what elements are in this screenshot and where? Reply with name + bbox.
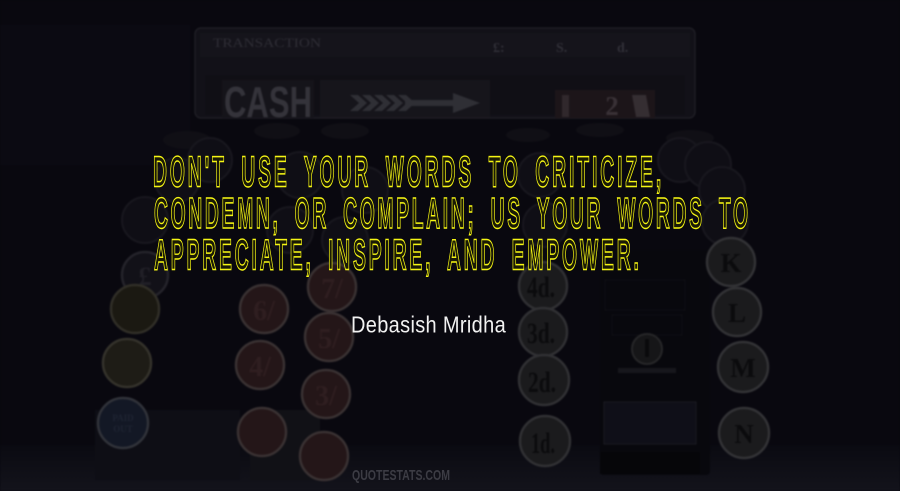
price counter digits — [555, 90, 655, 121]
key labels: letters: K — [720, 248, 742, 278]
knob — [632, 334, 662, 364]
author: Debasish Mridha — [351, 311, 507, 338]
label: pounds shillings pence — [493, 41, 628, 56]
key labels: letters: N — [734, 419, 754, 449]
label: pounds shillings pence: S. — [556, 41, 567, 56]
quote line 3: APPRECIATE, INSPIRE, AND EMPOWER. — [154, 231, 639, 280]
key labels: shilling: 3/ — [315, 381, 338, 412]
key labels: pence: 3d. — [527, 317, 555, 350]
key labels: shilling: 7/ — [321, 274, 344, 305]
quote line 2: CONDEMN, OR COMPLAIN; US YOUR WORDS TO — [154, 189, 748, 238]
key labels: letters — [720, 248, 756, 449]
keys row under window — [163, 123, 714, 149]
key labels: pence: 1d. — [531, 427, 555, 460]
key: paid out blue: PAID — [112, 413, 134, 423]
label: pounds shillings pence: d. — [617, 41, 628, 56]
keys: letters — [707, 238, 769, 458]
key labels: pence: 2d. — [528, 366, 556, 399]
label: pounds shillings pence: £: — [493, 41, 505, 56]
quote line 1: DON'T USE YOUR WORDS TO CRITICIZE, — [153, 148, 661, 197]
key: paid out blue: OUT — [113, 424, 133, 434]
price counter digits: 2 — [605, 91, 619, 121]
label: transaction: TRANSACTION — [213, 36, 321, 50]
key: pound: £ — [138, 262, 152, 291]
label: cash — [222, 80, 314, 118]
key labels: pence — [527, 271, 556, 460]
key: paid out blue — [98, 398, 148, 448]
central slab — [600, 250, 710, 475]
key labels: letters: M — [730, 353, 756, 383]
arrow — [320, 80, 490, 117]
key: olive left keys — [103, 285, 159, 387]
key labels: shilling — [249, 274, 344, 412]
upper faint keys — [122, 138, 748, 263]
panel: transaction window — [195, 28, 695, 127]
key labels: letters: L — [728, 298, 746, 328]
key: pound — [122, 252, 168, 298]
key labels: pence: 4d. — [527, 271, 555, 304]
quote text — [153, 148, 748, 280]
key labels: shilling: 6/ — [253, 296, 276, 327]
watermark: QUOTESTATS.COM — [352, 467, 450, 484]
key labels: shilling: 4/ — [249, 352, 272, 383]
keys: pence — [519, 262, 570, 466]
key labels: shilling: 5/ — [318, 324, 341, 355]
panel: transaction window: CASH — [224, 78, 312, 127]
keys: shilling red — [236, 263, 356, 480]
